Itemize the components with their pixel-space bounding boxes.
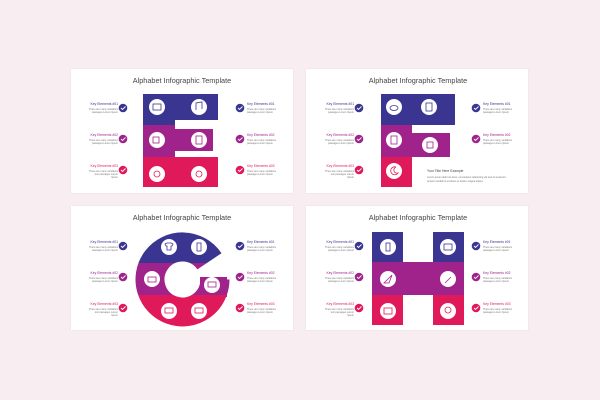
right labels F: There are many variations [483, 108, 513, 111]
left labels E: Key Elements #02 [90, 133, 118, 137]
left labels G: There are many variations [89, 246, 119, 249]
left labels G: text passages Lorem [95, 311, 118, 314]
left labels F [325, 102, 355, 179]
left labels F: text passages Lorem [331, 173, 354, 176]
right labels F: Key Elements #02 [483, 133, 511, 137]
checks G [119, 242, 244, 312]
right labels E: There are many variations [247, 108, 277, 111]
left labels E: Key Elements #01 [90, 102, 118, 106]
left labels H: Key Elements #03 [326, 302, 354, 306]
title: Alphabet Infographic Template [369, 213, 467, 222]
right labels E: passages Lorem Ipsum [247, 111, 273, 114]
left labels F: passages Lorem Ipsum [328, 111, 354, 114]
right labels G: passages Lorem Ipsum [247, 249, 273, 252]
left labels H: Ipsum [347, 314, 354, 317]
left labels F: Key Elements #03 [326, 164, 354, 168]
slide: letter H [306, 206, 528, 330]
left labels E: Ipsum [111, 176, 118, 179]
right labels G: There are many variations [247, 308, 277, 311]
letter H [372, 232, 464, 325]
title: Alphabet Infographic Template [133, 76, 231, 85]
left labels F: There are many variations [325, 108, 355, 111]
right labels H: There are many variations [483, 246, 513, 249]
left labels E: There are many variations [89, 139, 119, 142]
left labels G: There are many variations [89, 277, 119, 280]
left labels G: passages Lorem Ipsum [92, 249, 118, 252]
left labels E: passages Lorem Ipsum [92, 111, 118, 114]
icons G [144, 239, 220, 319]
left labels E: There are many variations [89, 170, 119, 173]
icons H [380, 239, 456, 319]
text block F: Lorem ipsum dolor sit amet, consectetur adipiscing elit sed do eiusmod [427, 176, 506, 179]
right labels H: Key Elements #01 [483, 240, 511, 244]
right labels G: Key Elements #02 [247, 271, 275, 275]
right labels E: passages Lorem Ipsum [247, 173, 273, 176]
text block F: Your Title Here Example [427, 169, 464, 173]
left labels F: passages Lorem Ipsum [328, 142, 354, 145]
right labels H: There are many variations [483, 308, 513, 311]
right labels G: There are many variations [247, 277, 277, 280]
right labels H [483, 240, 513, 314]
left labels F: Key Elements #01 [326, 102, 354, 106]
right labels E: Key Elements #02 [247, 133, 275, 137]
checks F [355, 104, 480, 174]
slide: letter E [71, 69, 293, 193]
right labels F: passages Lorem Ipsum [483, 142, 509, 145]
right labels G: passages Lorem Ipsum [247, 311, 273, 314]
left labels G: Key Elements #03 [90, 302, 118, 306]
text block F [427, 169, 506, 183]
left labels F: There are many variations [325, 139, 355, 142]
left labels H: passages Lorem Ipsum [328, 249, 354, 252]
right labels G: Key Elements #03 [247, 302, 275, 306]
left labels E: There are many variations [89, 108, 119, 111]
left labels G: passages Lorem Ipsum [92, 280, 118, 283]
title: Alphabet Infographic Template [369, 76, 467, 85]
slide: letter F [306, 69, 528, 193]
left labels H: passages Lorem Ipsum [328, 280, 354, 283]
right labels F: Key Elements #01 [483, 102, 511, 106]
right labels F: There are many variations [483, 139, 513, 142]
left labels E: passages Lorem Ipsum [92, 142, 118, 145]
left labels F: Ipsum [347, 176, 354, 179]
icons E [149, 99, 207, 182]
left labels H: Key Elements #01 [326, 240, 354, 244]
icons F [386, 99, 438, 179]
checks E [119, 104, 244, 174]
left labels H: There are many variations [325, 308, 355, 311]
left labels G: There are many variations [89, 308, 119, 311]
text block F: tempor incididunt ut labore et dolore magna aliqua [427, 180, 483, 183]
right labels E [247, 102, 277, 176]
right labels G: passages Lorem Ipsum [247, 280, 273, 283]
right labels H: There are many variations [483, 277, 513, 280]
left labels G [89, 240, 119, 317]
right labels H: Key Elements #03 [483, 302, 511, 306]
left labels F: Key Elements #02 [326, 133, 354, 137]
left labels F: There are many variations [325, 170, 355, 173]
left labels E [89, 102, 119, 179]
right labels G: Key Elements #01 [247, 240, 275, 244]
right labels F [483, 102, 513, 145]
right labels E: Key Elements #03 [247, 164, 275, 168]
right labels H: Key Elements #02 [483, 271, 511, 275]
left labels H: text passages Lorem [331, 311, 354, 314]
left labels H [325, 240, 355, 317]
right labels F: passages Lorem Ipsum [483, 111, 509, 114]
left labels H: There are many variations [325, 246, 355, 249]
right labels E: There are many variations [247, 170, 277, 173]
left labels G: Key Elements #01 [90, 240, 118, 244]
right labels H: passages Lorem Ipsum [483, 280, 509, 283]
right labels G [247, 240, 277, 314]
right labels E: There are many variations [247, 139, 277, 142]
left labels G: Key Elements #02 [90, 271, 118, 275]
right labels E: Key Elements #01 [247, 102, 275, 106]
letter E [143, 94, 218, 187]
right labels E: passages Lorem Ipsum [247, 142, 273, 145]
right labels H: passages Lorem Ipsum [483, 311, 509, 314]
right labels G: There are many variations [247, 246, 277, 249]
left labels E: Key Elements #03 [90, 164, 118, 168]
left labels H: Key Elements #02 [326, 271, 354, 275]
letter G [136, 232, 230, 326]
slide: letter G [71, 206, 293, 330]
title: Alphabet Infographic Template [133, 213, 231, 222]
left labels G: Ipsum [111, 314, 118, 317]
left labels E: text passages Lorem [95, 173, 118, 176]
right labels H: passages Lorem Ipsum [483, 249, 509, 252]
letter F [381, 94, 455, 187]
checks H [355, 242, 480, 312]
left labels H: There are many variations [325, 277, 355, 280]
